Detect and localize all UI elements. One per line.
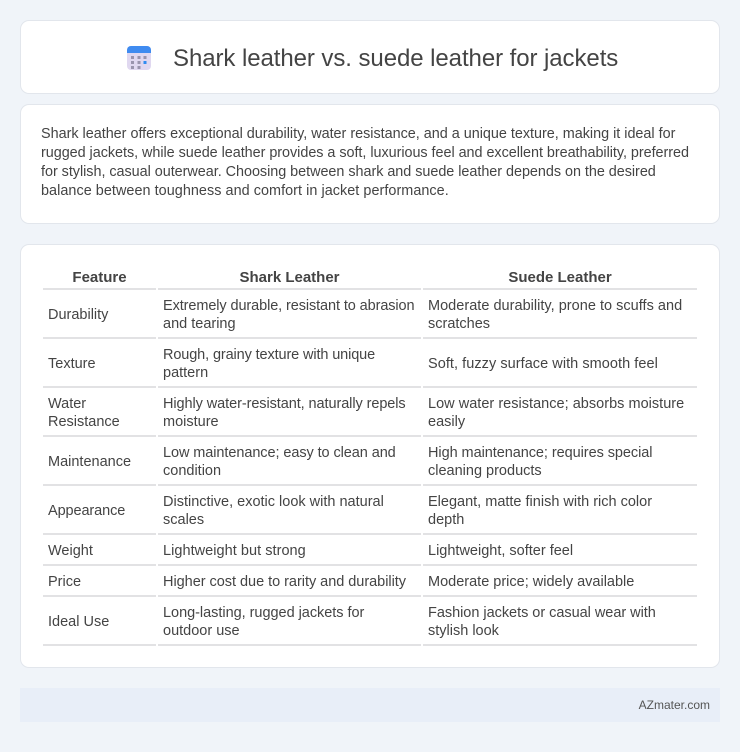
row: Water Resistance: Highly water-resistant, naturally repels xyxy=(163,396,406,412)
row: Appearance: depth xyxy=(428,512,464,528)
summary text xyxy=(41,126,689,199)
table header: Shark Leather xyxy=(239,269,340,286)
table header xyxy=(72,269,612,286)
row: Durability: Extremely durable, resistant to abrasion xyxy=(163,298,414,314)
row: Durability: Durability xyxy=(48,307,108,323)
footer credit: AZmater.com xyxy=(639,698,710,712)
row: Water Resistance: easily xyxy=(428,414,465,430)
row: Maintenance xyxy=(48,445,652,479)
row: Ideal Use: outdoor use xyxy=(163,623,240,639)
row: Texture: Soft, fuzzy surface with smooth feel xyxy=(428,356,658,372)
row: Weight: Lightweight but strong xyxy=(163,543,306,559)
row: Appearance: Elegant, matte finish with rich color xyxy=(428,494,652,510)
row: Weight: Lightweight, softer feel xyxy=(428,543,573,559)
row: Water Resistance: Low water resistance; absorbs moisture xyxy=(428,396,684,412)
row: Appearance xyxy=(48,494,652,528)
row: Texture: pattern xyxy=(163,365,208,381)
row: Durability: Moderate durability, prone to scuffs and xyxy=(428,298,682,314)
row: Weight xyxy=(48,543,573,559)
panel: comparison table xyxy=(20,244,720,668)
row: Price: Price xyxy=(48,574,81,590)
row: Price: Moderate price; widely available xyxy=(428,574,634,590)
row: Price: Higher cost due to rarity and durability xyxy=(163,574,406,590)
row: Maintenance: High maintenance; requires special xyxy=(428,445,652,461)
row: Ideal Use: Ideal Use xyxy=(48,614,109,630)
title card xyxy=(20,20,720,94)
row: Ideal Use: Fashion jackets or casual wear with xyxy=(428,605,656,621)
summary text: rugged jackets, while suede leather provides a soft, luxurious feel and excellent breathability, preferred xyxy=(41,145,689,161)
table header: Feature xyxy=(72,269,127,286)
row: Water Resistance: Resistance xyxy=(48,414,120,430)
row: Appearance: scales xyxy=(163,512,204,528)
row: Water Resistance xyxy=(48,396,684,430)
row: Appearance: Appearance xyxy=(48,503,125,519)
summary text: for stylish, casual outerwear. Choosing between shark and suede leather depends on the desired xyxy=(41,164,656,180)
row: Weight: Weight xyxy=(48,543,93,559)
row: Durability: scratches xyxy=(428,316,490,332)
row: Durability: and tearing xyxy=(163,316,236,332)
row: Maintenance: condition xyxy=(163,463,221,479)
title: Shark leather vs. suede leather for jackets xyxy=(173,45,618,72)
row: Ideal Use: stylish look xyxy=(428,623,499,639)
footer bar xyxy=(20,688,720,722)
row: Appearance: Distinctive, exotic look with natural xyxy=(163,494,384,510)
row: Maintenance: Low maintenance; easy to clean and xyxy=(163,445,396,461)
row: Water Resistance: moisture xyxy=(163,414,219,430)
summary text: balance between toughness and comfort in jacket performance. xyxy=(41,183,449,199)
row: Texture: Rough, grainy texture with unique xyxy=(163,347,375,363)
row: Price xyxy=(48,574,634,590)
panel: summary xyxy=(20,104,720,224)
row: Durability xyxy=(48,298,682,332)
row: Water Resistance: Water xyxy=(48,396,86,412)
table header: Suede Leather xyxy=(508,269,612,286)
row: Texture: Texture xyxy=(48,356,96,372)
icon: calendar xyxy=(127,46,151,70)
summary text: Shark leather offers exceptional durability, water resistance, and a unique texture, making it ideal for xyxy=(41,126,675,142)
row: Ideal Use xyxy=(48,605,656,639)
row: Maintenance: Maintenance xyxy=(48,454,131,470)
row: Maintenance: cleaning products xyxy=(428,463,542,479)
row: Texture xyxy=(48,347,658,381)
row: Ideal Use: Long-lasting, rugged jackets for xyxy=(163,605,364,621)
